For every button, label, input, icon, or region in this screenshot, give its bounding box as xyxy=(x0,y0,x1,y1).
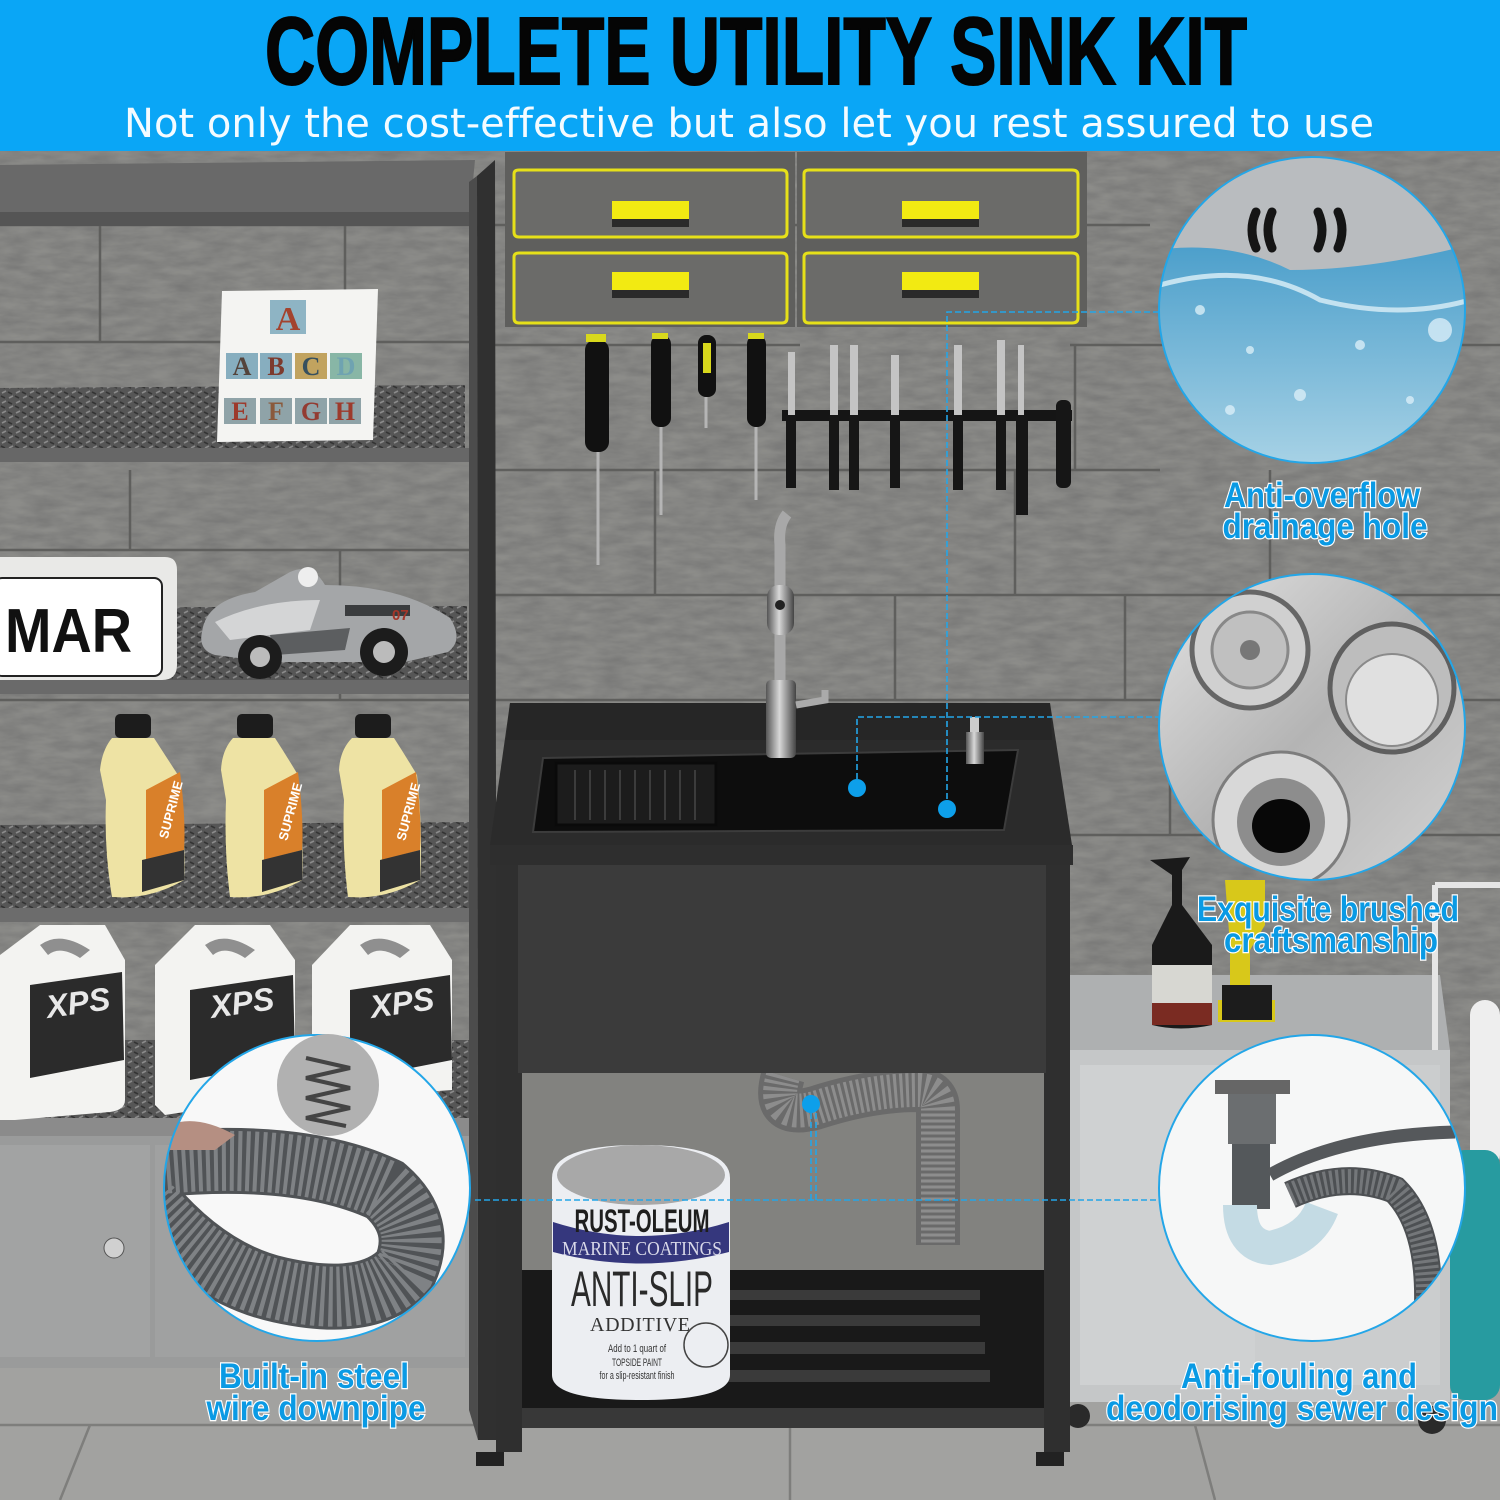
alphabet card: B xyxy=(267,352,285,381)
callout dots xyxy=(802,779,956,1113)
paint can: for a slip-resistant finish xyxy=(600,1370,674,1382)
sink deck xyxy=(490,703,1072,845)
label: steel wire downpipe xyxy=(206,1357,426,1428)
oil bottles: SUPRIME xyxy=(275,781,305,842)
sink apron xyxy=(490,845,1073,1073)
label: steel wire downpipe: wire downpipe xyxy=(206,1389,426,1428)
alphabet card: D xyxy=(337,352,355,381)
label: anti-overflow: Anti-overflow xyxy=(1224,476,1421,515)
shelf 1 xyxy=(0,160,475,226)
XPS jugs: XPS xyxy=(42,980,113,1025)
subtitle: Not only the cost-effective but also let you rest assured to use xyxy=(124,101,1374,147)
faucet xyxy=(766,514,825,758)
XPS jugs xyxy=(0,925,452,1120)
toy race car xyxy=(201,567,457,679)
XPS jugs: XPS xyxy=(206,980,277,1025)
alphabet card: C xyxy=(302,352,320,381)
panel: left metal shelving xyxy=(0,160,497,1440)
alphabet card: F xyxy=(268,397,284,426)
shelf 3 xyxy=(0,606,470,694)
under-sink back area xyxy=(520,1072,1045,1272)
oil bottles: SUPRIME xyxy=(393,781,423,842)
label: anti-fouling: Anti-fouling and xyxy=(1181,1357,1417,1396)
label: anti-overflow: drainage hole xyxy=(1222,507,1428,546)
detail circle: steel wire downpipe xyxy=(150,1035,470,1341)
alphabet card xyxy=(217,289,378,442)
label: brushed craftsmanship: Exquisite brushed xyxy=(1197,890,1459,929)
paint can: ADDITIVE xyxy=(590,1314,690,1336)
floor xyxy=(0,1365,1500,1500)
hanging tools xyxy=(585,333,1072,565)
detail circle: brushed strainers xyxy=(1155,570,1470,888)
alphabet card: A xyxy=(276,301,301,338)
spray bottle and drill xyxy=(1150,857,1275,1028)
drain pipe xyxy=(780,1076,938,1245)
shelf 2 xyxy=(0,385,470,462)
paint can: RUST-OLEUM xyxy=(574,1203,710,1239)
inset: spring wire xyxy=(277,1034,379,1136)
shelf post xyxy=(469,160,497,1440)
shelf 5 xyxy=(0,1040,470,1136)
drying rack xyxy=(556,763,716,825)
sign: MAR: MAR xyxy=(5,597,132,666)
oil bottles xyxy=(100,714,423,897)
alphabet card: H xyxy=(335,397,355,426)
label: brushed craftsmanship xyxy=(1197,890,1459,960)
header banner xyxy=(0,0,1500,151)
legs xyxy=(476,860,1070,1466)
label: anti-overflow xyxy=(1222,476,1428,546)
label: anti-fouling xyxy=(1106,1357,1498,1428)
XPS jugs: XPS xyxy=(366,980,437,1025)
alphabet card: G xyxy=(301,397,321,426)
alphabet card: A xyxy=(233,352,252,381)
label: steel wire downpipe: Built-in steel xyxy=(219,1357,409,1396)
right white cabinet xyxy=(1066,885,1500,1434)
wall drawers xyxy=(505,152,1087,327)
callout lines xyxy=(475,312,1160,1200)
detail circle: overflow hole xyxy=(1155,155,1470,470)
sign: MAR xyxy=(0,557,177,680)
label: brushed craftsmanship: craftsmanship xyxy=(1224,921,1438,960)
paint can: ANTI-SLIP xyxy=(571,1261,713,1317)
basin xyxy=(533,750,1018,832)
oil bottles: SUPRIME xyxy=(156,779,186,840)
paint can: MARINE COATINGS xyxy=(562,1238,722,1260)
sink unit xyxy=(476,514,1073,1466)
soap dispenser xyxy=(966,717,984,764)
detail circle: sewer drain xyxy=(1159,1035,1465,1341)
paint can: Add to 1 quart of xyxy=(608,1343,667,1355)
shelf 4 xyxy=(0,822,470,922)
toy race car: 07 xyxy=(392,607,409,624)
paint can: TOPSIDE PAINT xyxy=(612,1357,662,1369)
bottom shelf xyxy=(522,1270,1044,1428)
lower cabinet xyxy=(0,1136,470,1368)
alphabet card: E xyxy=(231,397,249,426)
paint can xyxy=(552,1145,730,1400)
